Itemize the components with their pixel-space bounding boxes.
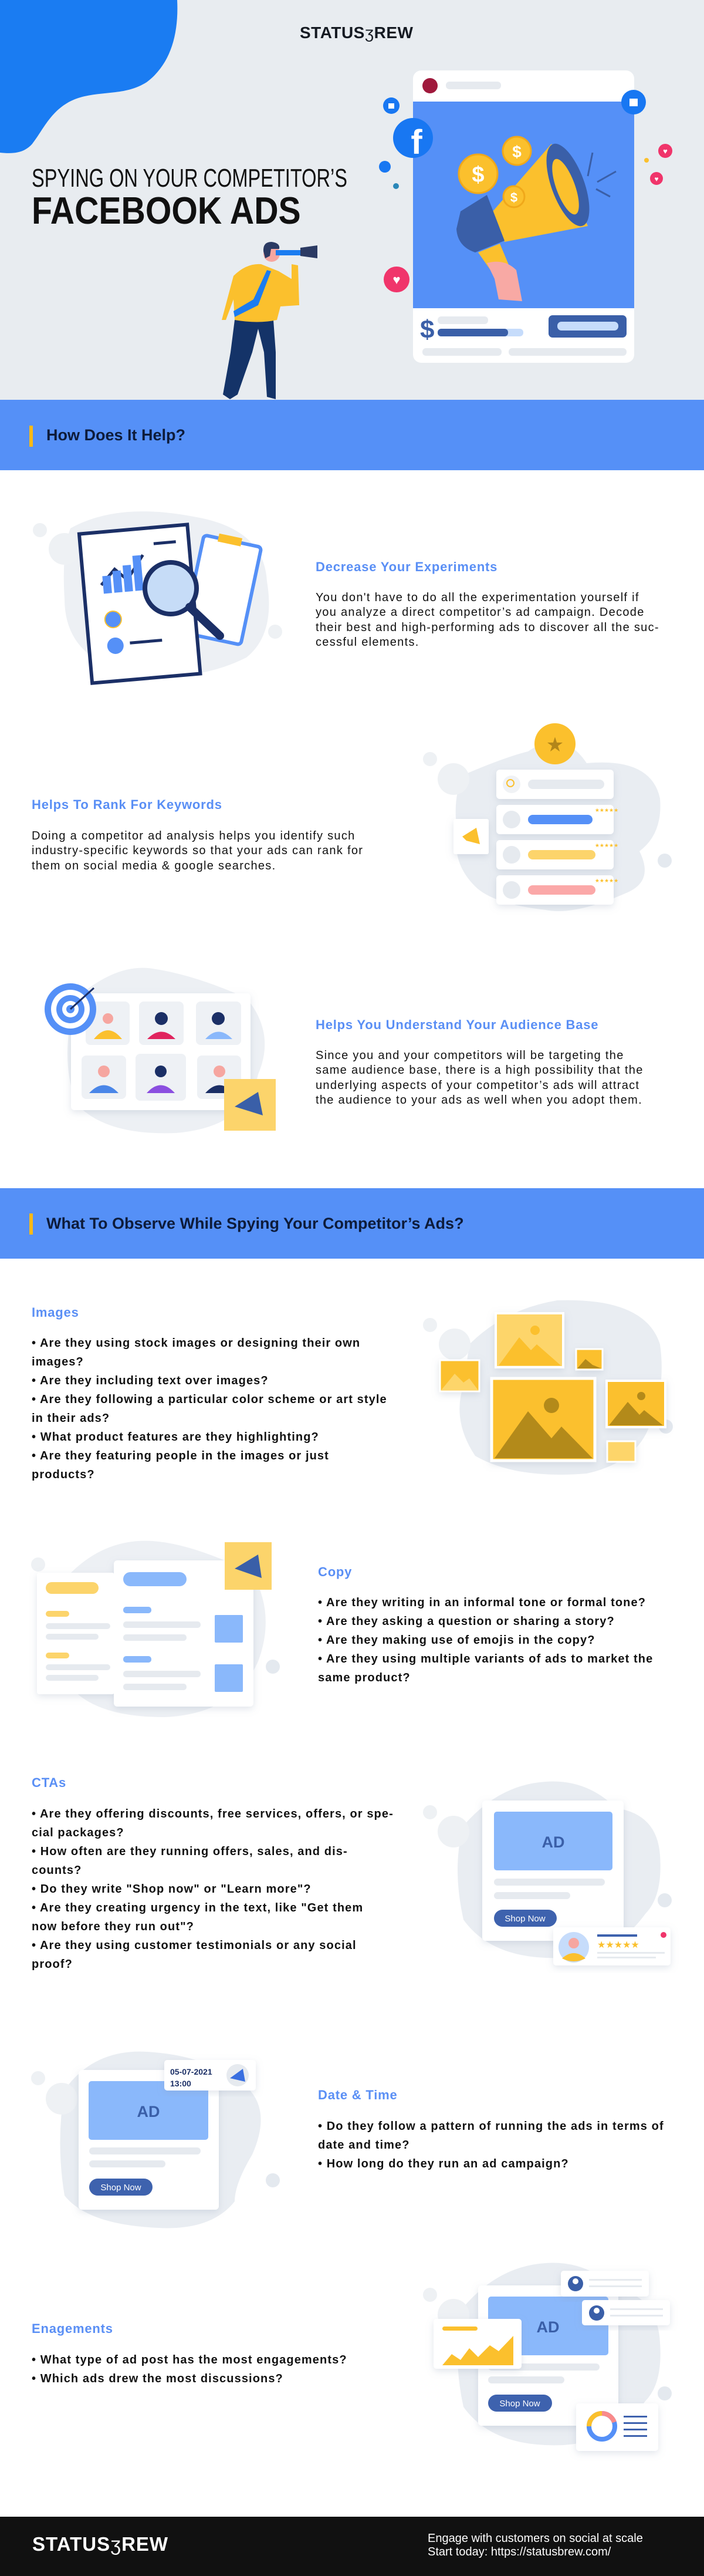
panel: engagement illustration: AD (536, 2318, 560, 2336)
bullets: images: • Are they including text over images? (32, 1374, 269, 1387)
illustration: facebook ad card: f (411, 123, 422, 161)
bullets: ctas: • Do they write "Shop now" or "Learn more"? (32, 1883, 312, 1896)
bullets: date time: date and time? (318, 2139, 410, 2152)
bullets: copy: • Are they using multiple variants of ads to market the (318, 1653, 653, 1665)
panel: date illustration: Shop Now (100, 2183, 141, 2193)
text: audience base (316, 1049, 644, 1107)
panel: keyword illustration: ★★★★★ (595, 807, 618, 813)
panel: date illustration (31, 2051, 280, 2228)
text: audience base: the audience to your ads as well when you adopt them. (316, 1094, 642, 1107)
bullets: copy (318, 1596, 653, 1684)
panel: cta illustration: Shop Now (505, 1914, 546, 1924)
text: decrease experiments: You don't have to do all the experimentation yourself if (316, 591, 639, 604)
footer text: Engage with customers on social at scale (428, 2532, 643, 2545)
panel: decrease experiments illustration (33, 511, 282, 685)
illustration: facebook ad card: $ (510, 190, 517, 205)
panel: cta illustration (423, 1781, 672, 1970)
illustration: man with telescope (222, 242, 317, 399)
bullets: engagements: • What type of ad post has the most engagements? (32, 2354, 347, 2366)
text: audience base: same audience base, there is a high possibility that the (316, 1064, 644, 1077)
bullets: images: images? (32, 1356, 84, 1368)
bullets: images (32, 1337, 387, 1481)
bullets: ctas: • How often are they running offers, sales, and dis- (32, 1845, 348, 1858)
panel: keyword illustration: ★★★★★ (595, 842, 618, 848)
illustration: facebook ad card: ♥ (654, 175, 659, 183)
bullets: ctas: proof? (32, 1958, 73, 1971)
bullets: copy: • Are they asking a question or sharing a story? (318, 1615, 615, 1628)
title: FACEBOOK ADS (32, 189, 301, 232)
title: SPYING ON YOUR COMPETITOR’S (32, 164, 347, 193)
bullets: ctas: now before they run out"? (32, 1920, 194, 1933)
panel: audience illustration (45, 967, 276, 1133)
heading: decrease experiments: Decrease Your Experiments (316, 559, 497, 574)
bullets: copy: same product? (318, 1671, 411, 1684)
text: rank keywords: them on social media & google searches. (32, 859, 276, 872)
text: rank keywords (32, 830, 363, 872)
panel: keyword illustration (423, 723, 672, 911)
text: decrease experiments: you analyze a direct competitor’s ad campaign. Decode (316, 606, 645, 619)
bullets: date time: • Do they follow a pattern of running the ads in terms of (318, 2120, 664, 2133)
illustration: facebook ad card: ♥ (663, 147, 668, 156)
panel: cta illustration: ★★★★★ (597, 1940, 639, 1950)
illustration: facebook ad card: $ (472, 163, 485, 187)
decorative blob (0, 0, 177, 153)
bullets: images: • Are they using stock images or designing their own (32, 1337, 360, 1350)
panel: images illustration (423, 1300, 673, 1475)
footer text: Start today: https://statusbrew.com/ (428, 2545, 611, 2558)
footer text (428, 2532, 643, 2558)
panel: engagement illustration: Shop Now (499, 2399, 540, 2409)
panel: date illustration: AD (137, 2103, 160, 2120)
bullets: ctas: • Are they offering discounts, free services, offers, or spe- (32, 1808, 394, 1820)
band: what to observe (0, 1188, 704, 1259)
text: audience base: Since you and your competitors will be targeting the (316, 1049, 624, 1062)
bullets: copy: • Are they writing in an informal tone or formal tone? (318, 1596, 646, 1609)
bullets: images: products? (32, 1468, 95, 1481)
panel: keyword illustration: ★★★★★ (595, 878, 618, 884)
footer (0, 2517, 704, 2576)
bullets: date time: • How long do they run an ad campaign? (318, 2157, 569, 2170)
illustration: facebook ad card: $ (512, 143, 522, 161)
logo header: STATUSʒREW (300, 23, 413, 42)
bullets: date time (318, 2120, 664, 2170)
heading: rank keywords: Helps To Rank For Keywords (32, 797, 222, 812)
bullets: copy: • Are they making use of emojis in the copy? (318, 1634, 595, 1647)
bullets: engagements (32, 2354, 347, 2385)
panel: copy illustration (31, 1540, 280, 1717)
panel: engagement illustration (423, 2263, 672, 2455)
heading: images: Images (32, 1305, 79, 1320)
bullets: ctas: • Are they creating urgency in the text, like "Get them (32, 1901, 363, 1914)
illustration: facebook ad card: $ (420, 315, 434, 344)
panel: cta illustration: AD (542, 1833, 564, 1851)
text: decrease experiments: cessful elements. (316, 636, 419, 649)
footer logo: STATUSʒREW (32, 2533, 168, 2555)
text: rank keywords: industry-specific keywords so that your ads can rank for (32, 844, 363, 857)
title (32, 164, 347, 232)
text: decrease experiments (316, 591, 659, 649)
text: audience base: underlying aspects of your competitor’s ads will attract (316, 1079, 639, 1092)
bullets: ctas: counts? (32, 1864, 82, 1877)
heading: copy: Copy (318, 1565, 352, 1579)
text: decrease experiments: their best and high-performing ads to discover all the suc- (316, 621, 659, 634)
bullets: ctas: cial packages? (32, 1826, 124, 1839)
bullets: ctas: • Are they using customer testimonials or any social (32, 1939, 357, 1952)
panel: date illustration: 05-07-2021 (170, 2067, 212, 2076)
bullets: images: • What product features are they highlighting? (32, 1431, 319, 1444)
illustration: facebook ad card (379, 70, 672, 363)
heading: audience base: Helps You Understand Your Audience Base (316, 1017, 598, 1032)
panel: keyword illustration: ★ (546, 734, 564, 756)
bullets: images: in their ads? (32, 1412, 110, 1425)
header background (0, 0, 704, 400)
text: rank keywords: Doing a competitor ad analysis helps you identify such (32, 830, 356, 842)
bullets: ctas (32, 1808, 394, 1971)
heading: engagements: Enagements (32, 2321, 113, 2336)
illustration: facebook ad card: ♥ (392, 272, 401, 287)
bullets: engagements: • Which ads drew the most discussions? (32, 2372, 283, 2385)
bullets: images: • Are they following a particular color scheme or art style (32, 1393, 387, 1406)
band: how does it help (0, 400, 704, 470)
bullets: images: • Are they featuring people in the images or just (32, 1449, 329, 1462)
panel: date illustration: 13:00 (170, 2079, 191, 2088)
band: what to observe: What To Observe While Spying Your Competitor’s Ads? (46, 1215, 464, 1232)
heading: date time: Date & Time (318, 2088, 398, 2102)
heading: ctas: CTAs (32, 1775, 66, 1790)
band: how does it help: How Does It Help? (46, 426, 185, 444)
